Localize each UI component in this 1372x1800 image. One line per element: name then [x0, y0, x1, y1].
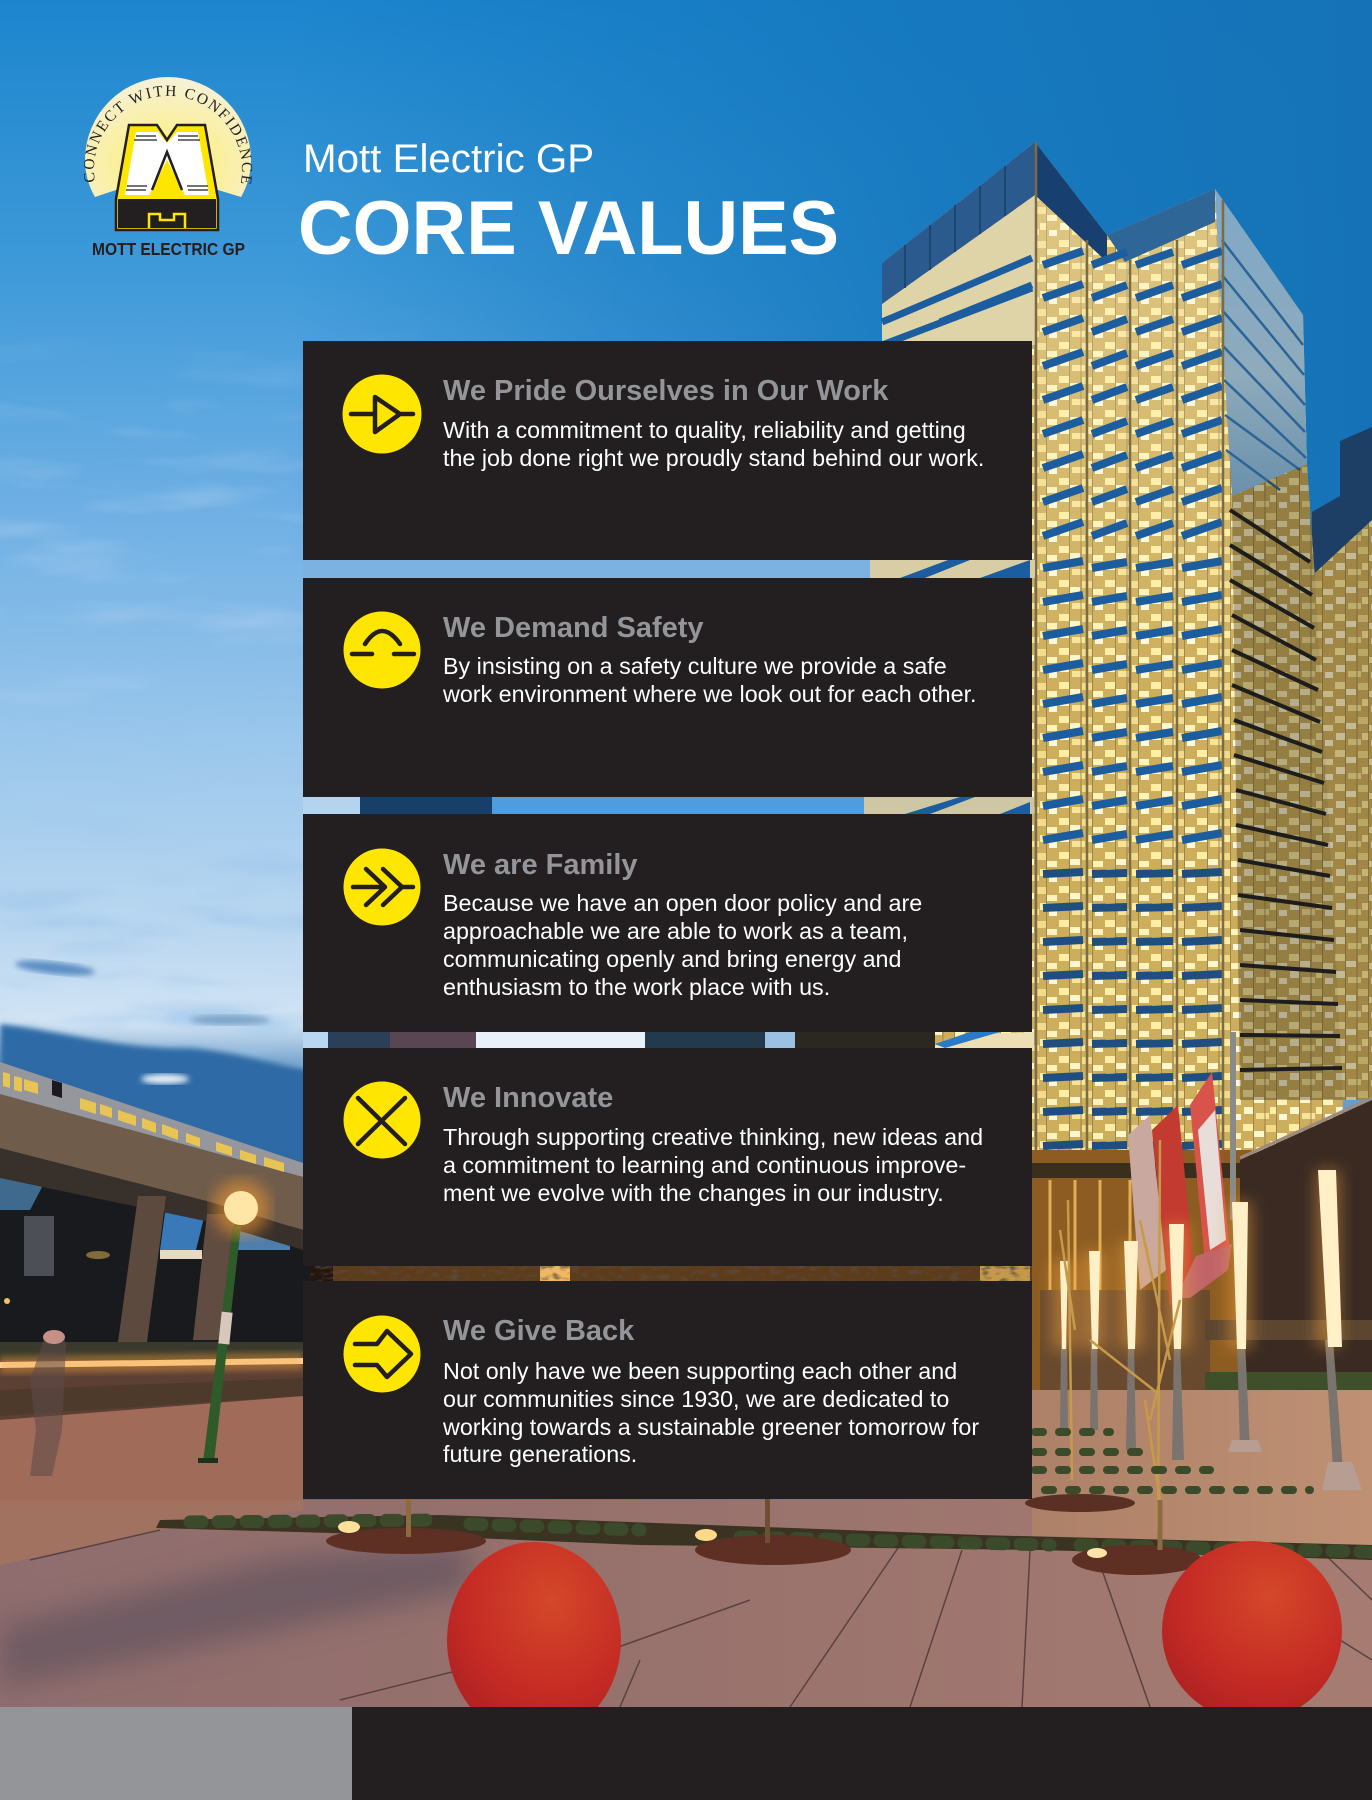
body text: future generations.: [443, 1441, 637, 1467]
icon: cross: [344, 1082, 420, 1158]
icon: diode: [342, 374, 422, 454]
side tower right: [1312, 427, 1372, 1100]
logo emblem: [116, 125, 218, 230]
right face, lower gold with dark stripes: [1232, 464, 1343, 1100]
body text: [443, 1124, 983, 1206]
sidewalk and road: [0, 1342, 303, 1360]
logo name: MOTT ELECTRIC GP: [92, 239, 245, 259]
panel: We Give Back: [303, 1281, 1032, 1499]
body text: the job done right we proudly stand behind our work.: [443, 445, 984, 471]
body text: work environment where we look out for each other.: [442, 681, 977, 707]
body text: Through supporting creative thinking, new ideas and: [443, 1124, 983, 1150]
gap 4: [303, 1266, 1033, 1281]
left street scene: [0, 1062, 310, 1500]
gap 1: [303, 560, 1035, 578]
logo: [84, 77, 252, 259]
heading: We Give Back: [443, 1315, 635, 1347]
icon: connector: [344, 848, 420, 926]
strips seen between panels: [303, 560, 1035, 1281]
icon: switch: [344, 612, 420, 688]
planting strip: [156, 1499, 1372, 1575]
banners: [1128, 1115, 1166, 1290]
red sphere left: [447, 1542, 621, 1738]
flagpole: [1230, 1032, 1236, 1220]
lamp post: [203, 1226, 241, 1462]
parapet: [882, 142, 1035, 304]
logo sun: [85, 77, 251, 197]
body text: ment we evolve with the changes in our industry.: [443, 1180, 944, 1206]
body text: [443, 417, 984, 471]
logo tagline: CONNECT WITH CONFIDENCE: [84, 86, 252, 184]
title: CORE VALUES: [298, 186, 839, 271]
left face stripes: [882, 258, 1032, 345]
body text: working towards a sustainable greener tomorrow for: [442, 1414, 979, 1440]
gap 3: [303, 1032, 1034, 1048]
footer dark block: [352, 1707, 1372, 1800]
heading: We Pride Ourselves in Our Work: [443, 375, 889, 407]
pillars: [118, 1196, 166, 1342]
heading: We Demand Safety: [443, 612, 704, 644]
icon: plug: [344, 1316, 420, 1392]
ground and pavement: [0, 1499, 1372, 1707]
clouds: [0, 368, 303, 1070]
heading: We Innovate: [443, 1082, 613, 1114]
left face top, pale: [882, 195, 1035, 345]
planters: [1035, 1432, 1310, 1490]
body text: communicating openly and bring energy and: [443, 946, 901, 972]
train: [0, 1062, 303, 1177]
body text: Not only have we been supporting each other and: [443, 1358, 957, 1384]
red sphere right: [1162, 1541, 1342, 1721]
bare trees: [1060, 1140, 1180, 1530]
body text: a commitment to learning and continuous improve-: [443, 1152, 966, 1178]
body text: our communities since 1930, we are dedicated to: [443, 1386, 949, 1412]
plaza floor: [1032, 1390, 1372, 1545]
bridge deck: [0, 1094, 303, 1230]
body text: [442, 653, 977, 707]
main tower: [864, 142, 1343, 1170]
right plaza: [1025, 1032, 1372, 1545]
gap 2: [303, 797, 1034, 814]
light streak: [0, 1358, 303, 1368]
body text: enthusiasm to the work place with us.: [443, 974, 830, 1000]
dark pavilion: [1240, 1100, 1372, 1395]
person: [30, 1332, 66, 1476]
panel: We are Family: [303, 814, 1032, 1032]
dark evening clouds: [0, 958, 320, 1180]
front face blue stripes: [1043, 251, 1222, 1146]
light poles: [1060, 1170, 1362, 1490]
podium glass: [1032, 1150, 1252, 1390]
footer grey block: [0, 1707, 352, 1800]
panel: We Demand Safety: [303, 578, 1032, 797]
tower base fill: [864, 142, 1343, 1170]
train windows: [3, 1072, 284, 1172]
body text: By insisting on a safety culture we provide a safe: [443, 653, 947, 679]
trees and buildings under the bridge: [0, 1170, 310, 1350]
body text: Because we have an open door policy and are: [443, 890, 922, 916]
right face, upper blue glass: [1215, 189, 1307, 496]
subtitle: Mott Electric GP: [303, 136, 594, 181]
pavement seams: [30, 1530, 1372, 1707]
heading: We are Family: [443, 849, 638, 881]
panel: We Innovate: [303, 1048, 1032, 1266]
body text: approachable we are able to work as a team,: [443, 918, 908, 944]
panel: We Pride Ourselves in Our Work: [303, 341, 1032, 560]
body text: [442, 1358, 979, 1467]
footer: [0, 1707, 1372, 1800]
body text: With a commitment to quality, reliability and getting: [443, 417, 966, 443]
body text: [443, 890, 922, 1000]
